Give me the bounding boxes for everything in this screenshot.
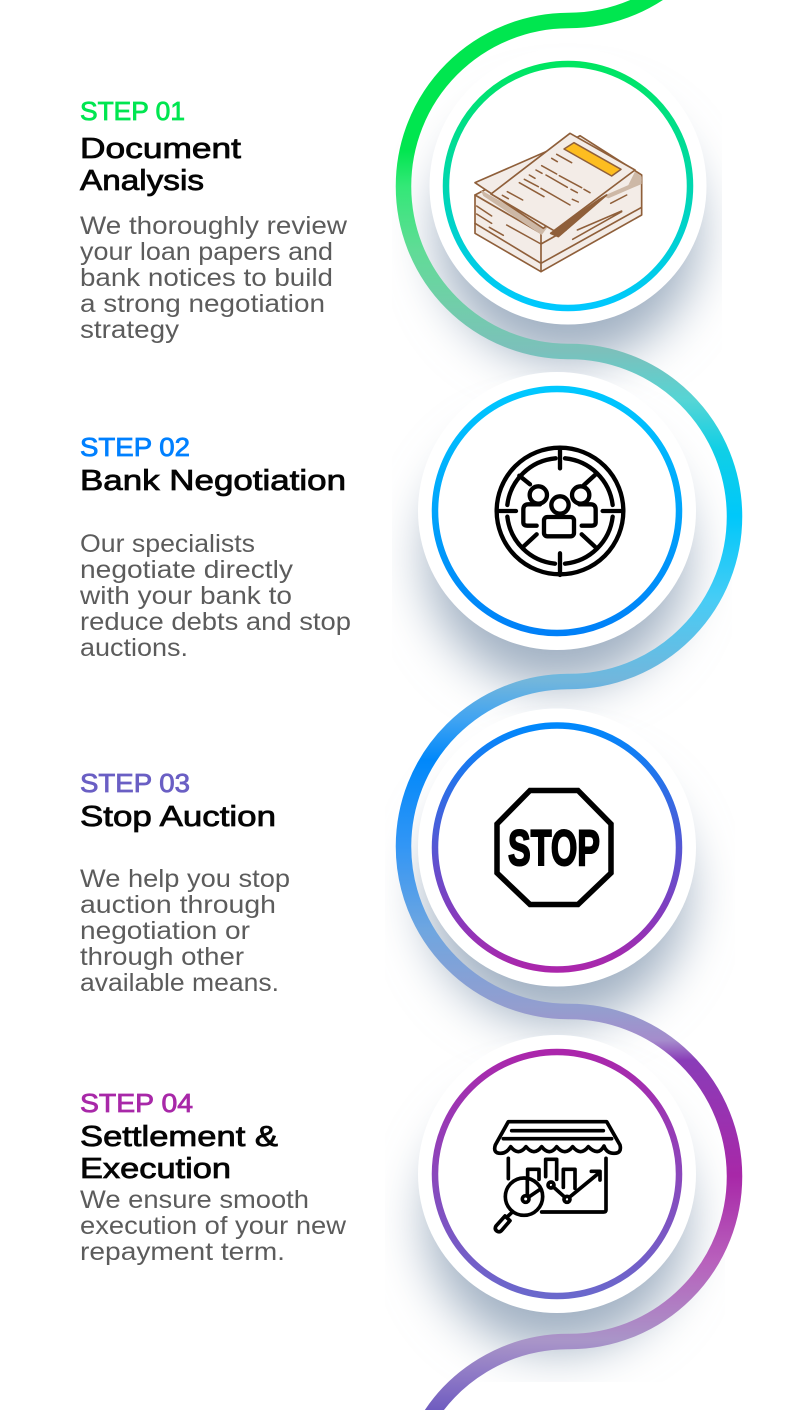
panel: step 03 circle — [418, 708, 696, 986]
description: available means. — [80, 969, 279, 997]
text block: step 01 — [80, 96, 348, 344]
icon: team in target — [497, 448, 623, 575]
description — [80, 1186, 347, 1266]
description: a strong negotiation — [80, 290, 325, 318]
step label: STEP 03 — [80, 768, 190, 798]
heading — [80, 1121, 278, 1185]
heading: Bank Negotiation — [80, 465, 346, 497]
step label: STEP 02 — [80, 432, 190, 462]
description: reduce debts and stop — [80, 608, 351, 636]
text block: step 02 — [79, 432, 351, 662]
description: execution of your new — [80, 1212, 347, 1240]
description — [79, 530, 351, 662]
text block: step 03 — [80, 768, 290, 997]
panel: step 02 circle — [418, 372, 696, 650]
heading: Document — [80, 133, 241, 165]
winding gradient ribbon — [403, 0, 735, 1410]
description: We help you stop — [80, 865, 290, 893]
description: bank notices to build — [80, 264, 333, 292]
description: auctions. — [80, 634, 188, 662]
heading: Settlement & — [80, 1121, 278, 1153]
icon: shop with chart and magnifier — [495, 1122, 620, 1232]
description: negotiation or — [80, 917, 250, 945]
description: We thoroughly review — [80, 212, 348, 240]
heading: Stop Auction — [80, 801, 276, 833]
icon: stop sign: STOP — [508, 820, 600, 876]
description: repayment term. — [80, 1238, 285, 1266]
description: Our specialists — [80, 530, 255, 558]
step label: STEP 04 — [80, 1088, 193, 1118]
description — [80, 865, 290, 997]
heading: Execution — [80, 1153, 231, 1185]
panel: step 01 circle — [430, 48, 706, 324]
description: with your bank to — [79, 582, 292, 610]
step label: STEP 01 — [80, 96, 185, 126]
description: through other — [80, 943, 244, 971]
heading: Analysis — [80, 165, 204, 197]
description: your loan papers and — [80, 238, 333, 266]
panel: step 04 circle — [418, 1035, 696, 1313]
icon: stack of documents — [475, 133, 642, 272]
text block: step 04 — [80, 1088, 347, 1266]
icon: stop sign — [497, 790, 611, 904]
description: auction through — [80, 891, 276, 919]
description: strategy — [80, 316, 180, 344]
heading — [80, 133, 241, 197]
circle drop shadows — [427, 102, 698, 1350]
description — [80, 212, 348, 344]
description: negotiate directly — [80, 556, 294, 584]
description: We ensure smooth — [80, 1186, 309, 1214]
